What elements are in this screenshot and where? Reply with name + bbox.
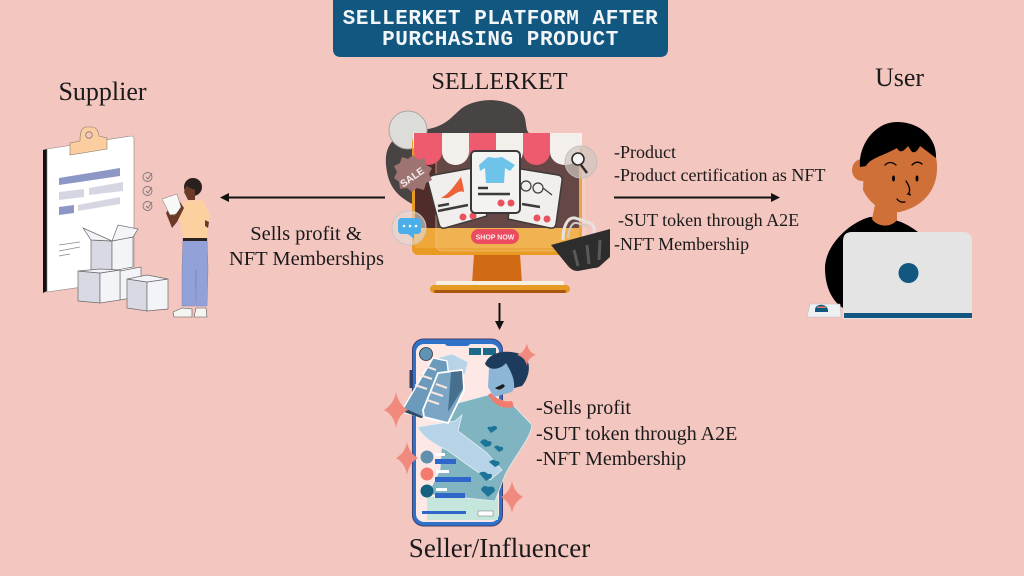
clipboard [43, 127, 134, 293]
facial features [885, 162, 922, 202]
phone [410, 339, 502, 526]
shop now button [471, 229, 519, 244]
mouse pad [807, 304, 841, 317]
text: user receives, lower [614, 210, 799, 254]
text: supplier receives [229, 223, 384, 270]
jeans [427, 497, 498, 520]
magnifier [565, 146, 597, 178]
right sneaker [423, 370, 464, 423]
shop now button: SHOP NOW [476, 234, 515, 242]
text: user receives, upper: -Product [614, 142, 676, 162]
heading: Sellerket: SELLERKET [431, 68, 568, 95]
text: seller receives [536, 397, 737, 470]
icon: user with laptop [807, 122, 972, 319]
face [863, 135, 937, 212]
title banner: PURCHASING PRODUCT [382, 29, 619, 52]
head [184, 178, 202, 196]
text: user receives, lower: -NFT Membership [614, 234, 749, 254]
text: seller receives: -SUT token through A2E [536, 423, 737, 445]
icon: seller with phone and sneakers [384, 339, 536, 526]
heading: Supplier: Supplier [58, 77, 147, 106]
monitor body [412, 136, 582, 255]
torso [428, 395, 532, 501]
arrow: Sellerket to User [614, 193, 780, 202]
hearts [479, 426, 503, 497]
sparkles [384, 343, 536, 513]
sneakers [404, 354, 468, 423]
arm [418, 415, 502, 480]
shirt [177, 200, 210, 238]
head [485, 352, 529, 397]
monitor stand [472, 254, 522, 284]
comment list [420, 450, 493, 516]
paper [162, 194, 181, 215]
icon: online store monitor [386, 100, 610, 293]
product card: shoe [428, 167, 487, 228]
person [162, 178, 210, 317]
text: supplier receives: Sells profit & [250, 223, 362, 245]
checkmarks [143, 172, 152, 210]
arrow: Sellerket to Supplier [220, 193, 385, 202]
glass circle [389, 111, 427, 149]
hand [438, 354, 468, 378]
title banner [333, 0, 668, 57]
arrow: Sellerket to Seller [495, 303, 504, 330]
body [825, 217, 918, 309]
text: user receives, lower: -SUT token through A2E [618, 210, 799, 230]
text: seller receives: -Sells profit [536, 397, 631, 419]
chat bubble [392, 211, 426, 245]
heading: User: User [875, 63, 924, 92]
shoes [173, 308, 192, 317]
arm [166, 202, 184, 228]
text: user receives, upper: -Product certification as NFT [614, 165, 825, 185]
neck [872, 200, 897, 226]
awning [413, 133, 582, 165]
text: seller receives: -NFT Membership [536, 448, 686, 470]
hair [860, 122, 936, 167]
icon: supplier with clipboard and boxes [43, 127, 210, 317]
product card: glasses [508, 168, 562, 228]
laptop [843, 232, 972, 319]
text: supplier receives: NFT Memberships [229, 248, 384, 270]
title banner: SELLERKET PLATFORM AFTER [343, 8, 658, 31]
product card: t-shirt [471, 151, 520, 213]
text: user receives, upper [614, 142, 825, 185]
sale badge: SALE [398, 166, 427, 190]
left sneaker [404, 358, 449, 417]
dark blob behind monitor [386, 100, 530, 240]
heading: Seller/Influencer: Seller/Influencer [409, 533, 590, 563]
collar [488, 393, 514, 408]
sale badge [394, 155, 432, 192]
ear [852, 159, 872, 181]
monitor base [430, 281, 570, 293]
trousers [182, 238, 208, 306]
boxes [78, 225, 168, 311]
shopping basket [551, 218, 610, 271]
